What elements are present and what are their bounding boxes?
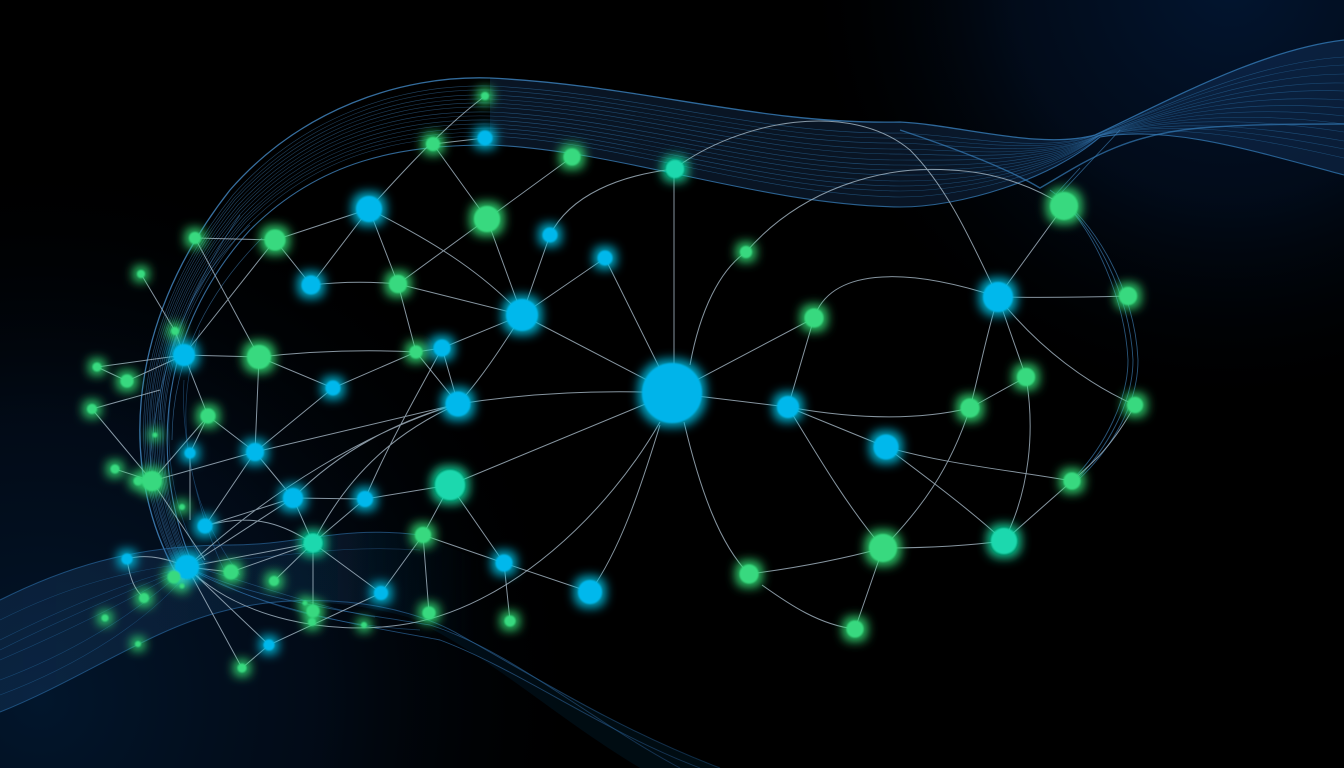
right cluster connections — [674, 121, 1135, 629]
hub connections — [187, 169, 814, 628]
lower left connections — [92, 348, 590, 668]
green nodes — [87, 92, 1143, 672]
teal nodes — [304, 160, 1017, 554]
ribbon: lower flowing wave — [0, 330, 720, 768]
ribbon: right loop strands — [1050, 130, 1138, 480]
upper left connections — [141, 96, 675, 404]
network nodes — [87, 92, 1143, 672]
blue nodes — [122, 130, 1013, 650]
network connections — [92, 96, 1135, 668]
central hub node — [642, 363, 702, 423]
ribbon: upper flowing wave — [140, 40, 1344, 580]
